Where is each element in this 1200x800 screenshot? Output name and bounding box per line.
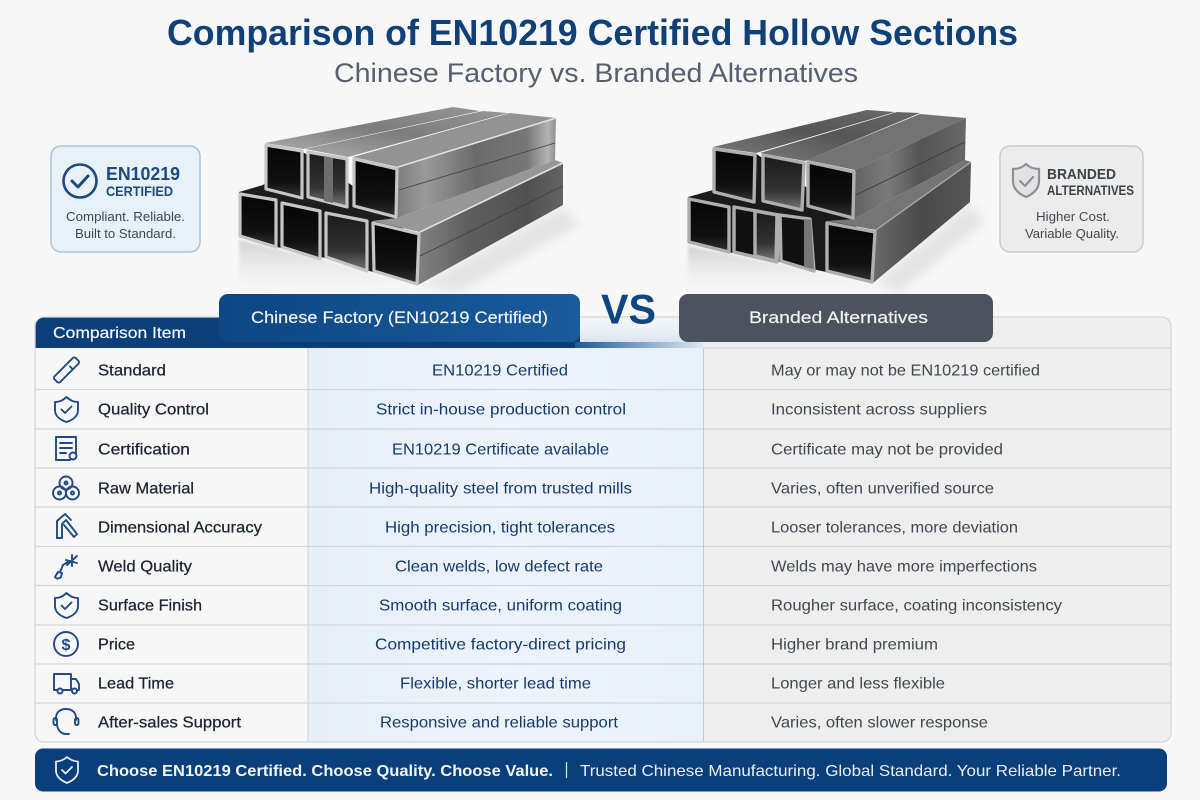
icon: headset (54, 709, 78, 734)
branded value: May or may not be EN10219 certified (771, 362, 1040, 380)
vs label: VS (601, 286, 656, 332)
column tab: branded alternatives: Branded Alternatives (749, 308, 928, 327)
chinese factory value: Responsive and reliable support (380, 714, 619, 732)
icon: delivery truck (54, 674, 79, 694)
row: after-sales support (54, 709, 988, 734)
icon: steel coils (53, 476, 79, 500)
badge subheading: CERTIFIED (106, 183, 173, 199)
branded value: Inconsistent across suppliers (771, 402, 987, 418)
chinese factory value: EN10219 Certificate available (392, 442, 609, 458)
subtitle: Chinese Factory vs. Branded Alternatives (334, 58, 858, 88)
column tab: chinese factory (219, 294, 580, 342)
row: raw material (53, 476, 994, 500)
badge text: Higher Cost. (1036, 209, 1110, 224)
icon: dollar coin (54, 632, 78, 656)
row: dimensional accuracy (57, 514, 1018, 538)
branded value: Certificate may not be provided (771, 442, 1003, 458)
row: quality control (55, 397, 987, 422)
icon: dollar coin: $ (62, 637, 71, 654)
icon: shield (55, 397, 78, 422)
row label: Certification (98, 442, 190, 458)
badge: EN10219 certified (51, 146, 200, 252)
icon: welding torch (55, 555, 77, 578)
footer divider (566, 762, 568, 778)
footer banner (35, 748, 1167, 792)
row: lead time (54, 674, 945, 694)
branded value: Higher brand premium (771, 636, 938, 654)
column header: comparison item: Comparison Item (53, 325, 186, 342)
column tab: chinese factory: Chinese Factory (EN10219 Certified) (251, 308, 548, 327)
icon: footer shield (56, 757, 78, 783)
title: Comparison of EN10219 Certified Hollow Sections (167, 12, 1018, 53)
chinese factory value: Strict in-house production control (376, 402, 626, 418)
chinese factory value: Flexible, shorter lead time (400, 676, 591, 692)
branded value: Longer and less flexible (771, 676, 945, 692)
badge heading: BRANDED (1047, 166, 1116, 183)
branded value: Rougher surface, coating inconsistency (771, 598, 1062, 614)
column tab: branded alternatives (679, 294, 993, 342)
badge text line 2: Built to Standard. (75, 226, 176, 241)
row label: Lead Time (98, 676, 174, 692)
row label: Price (98, 636, 135, 654)
row label: Dimensional Accuracy (98, 520, 262, 536)
row label: Quality Control (98, 402, 209, 418)
row label: After-sales Support (98, 714, 242, 732)
chinese factory value: Smooth surface, uniform coating (379, 598, 622, 614)
badge: branded alternatives (1000, 146, 1143, 252)
footer call to action: Choose EN10219 Certified. Choose Quality. Choose Value. (97, 763, 553, 780)
branded value: Varies, often slower response (771, 714, 988, 732)
chinese factory value: High-quality steel from trusted mills (369, 480, 632, 498)
row label: Standard (98, 362, 166, 380)
branded value: Looser tolerances, more deviation (771, 520, 1018, 536)
badge subheading: ALTERNATIVES (1047, 183, 1134, 198)
icon: check circle (64, 164, 96, 198)
icon: calipers (57, 514, 77, 538)
chinese factory value: EN10219 Certified (432, 362, 568, 380)
image: polished steel hollow sections (239, 107, 580, 294)
row label: Surface Finish (98, 598, 202, 614)
row: surface finish (55, 593, 1062, 618)
row label: Raw Material (98, 480, 194, 498)
badge heading: EN10219 (106, 164, 180, 184)
badge text: Compliant. Reliable. (66, 209, 185, 224)
comparison table (35, 317, 1171, 742)
row: price (54, 632, 938, 656)
row: standard (53, 357, 1040, 383)
row label: Weld Quality (98, 558, 192, 576)
icon: grey shield (1013, 164, 1039, 197)
chinese factory value: Clean welds, low defect rate (395, 558, 603, 576)
chinese factory value: Competitive factory-direct pricing (375, 636, 626, 654)
branded value: Varies, often unverified source (771, 480, 994, 498)
icon: ruler (53, 357, 80, 383)
chinese factory value: High precision, tight tolerances (385, 520, 615, 536)
row: certification (56, 437, 1003, 460)
icon: certificate (56, 437, 76, 460)
footer tagline: Trusted Chinese Manufacturing. Global Standard. Your Reliable Partner. (580, 763, 1121, 780)
row: weld quality (55, 555, 1037, 578)
branded value: Welds may have more imperfections (771, 558, 1037, 576)
badge text line 2: Variable Quality. (1025, 226, 1119, 241)
image: rough black steel hollow sections (688, 110, 985, 294)
icon: shield (55, 593, 78, 618)
